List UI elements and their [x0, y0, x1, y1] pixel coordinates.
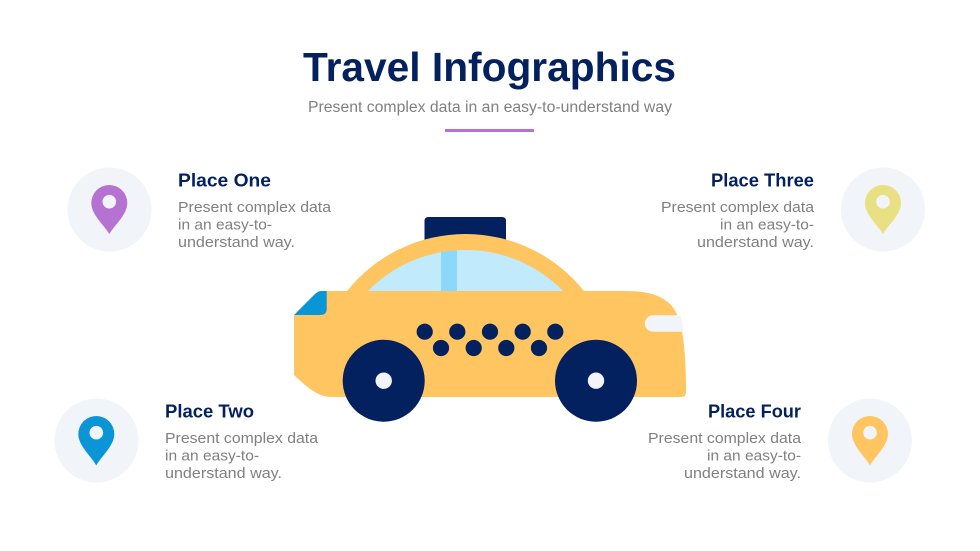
icon: yellow pin [841, 168, 925, 252]
panel: place two [54, 398, 322, 482]
text: place four body: Present complex data [648, 431, 802, 447]
text: place one body: understand way. [178, 235, 295, 251]
taxi body [294, 234, 686, 397]
taxi window [368, 250, 563, 291]
rear light [294, 291, 327, 315]
taxi illustration [294, 217, 686, 422]
taxi roof sign [424, 217, 506, 242]
text: place three body: in an easy-to- [720, 218, 814, 234]
text: place four body: understand way. [684, 466, 801, 482]
text: place two body: in an easy-to- [165, 448, 259, 464]
panel: place four [648, 398, 912, 482]
icon: blue pin [54, 398, 138, 482]
subtitle: Present complex data in an easy-to-understand way [308, 99, 672, 116]
accent underline [445, 129, 534, 132]
panel: place three [661, 168, 925, 252]
text: place three body: understand way. [697, 235, 814, 251]
title: Travel Infographics [303, 44, 676, 90]
window pillar [441, 250, 457, 291]
headlight [645, 315, 684, 332]
heading: place four: Place Four [708, 400, 801, 422]
panel: place one [68, 168, 335, 252]
heading: place three: Place Three [711, 170, 814, 190]
icon: orange pin [828, 398, 912, 482]
text: place three body: Present complex data [661, 200, 815, 216]
text: place one body: in an easy-to- [178, 218, 272, 234]
text: place one body: Present complex data [178, 200, 332, 216]
front wheel [555, 340, 637, 422]
heading: place two: Place Two [165, 400, 254, 422]
rear wheel [343, 340, 425, 422]
text: place two body: understand way. [165, 466, 282, 482]
taxi checker dots [417, 324, 563, 356]
text: place four body: in an easy-to- [707, 448, 801, 464]
icon: purple pin [68, 168, 152, 252]
text: place two body: Present complex data [165, 431, 319, 447]
heading: place one: Place One [178, 170, 271, 190]
